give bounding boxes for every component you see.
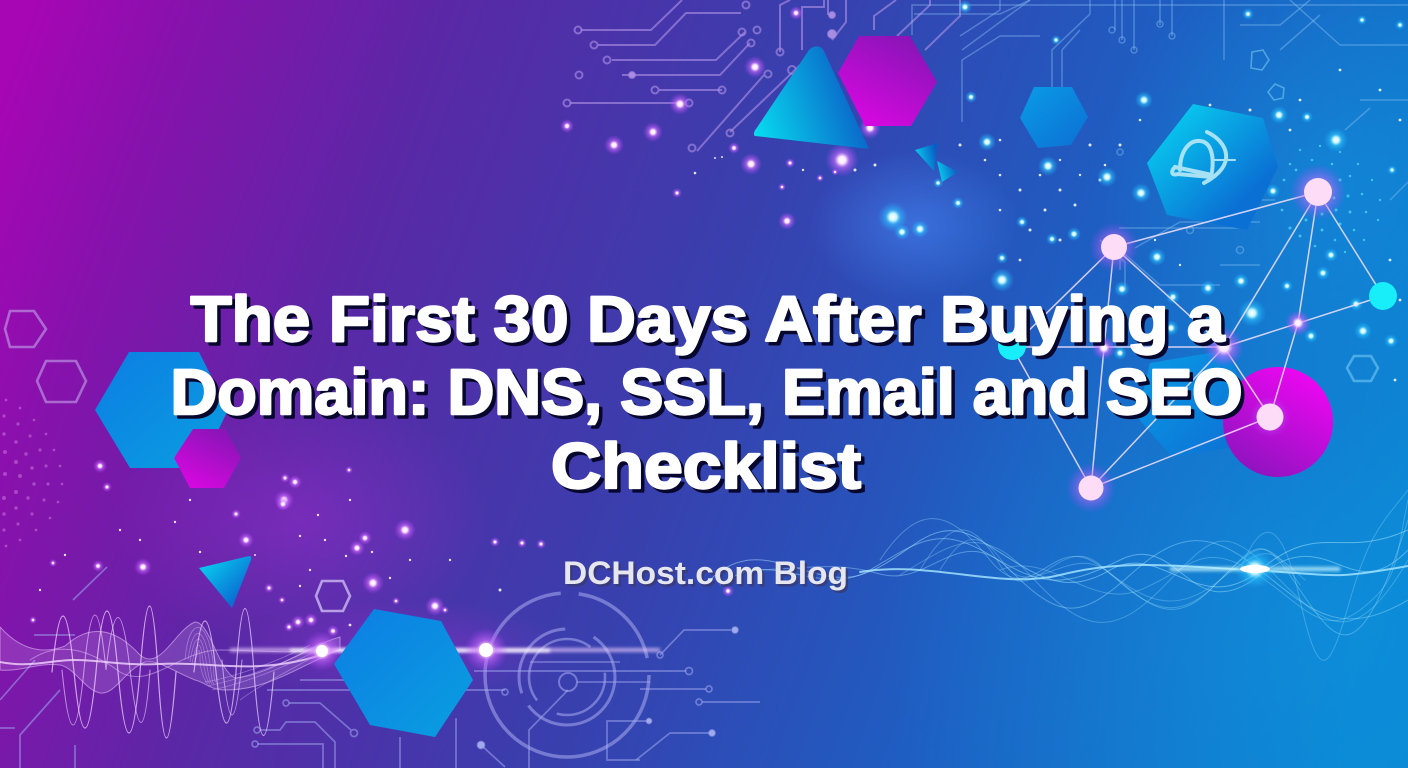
hexagon: magenta left xyxy=(174,429,241,488)
hexagon: blue top xyxy=(1020,87,1088,148)
circuit lines: top right xyxy=(912,0,1408,290)
network nodes: cyan xyxy=(998,282,1397,360)
sparkle particles: cyan xyxy=(878,0,1405,360)
dotted halftone around top right node xyxy=(1281,145,1381,253)
target dial xyxy=(485,593,650,757)
subtitle: DCHost.com Blog: DCHost.com Blog xyxy=(563,555,848,591)
network graph xyxy=(998,164,1397,513)
waveform ribbon xyxy=(0,622,340,693)
hexagon: blue bottom xyxy=(334,609,473,737)
title shadow: Domain: DNS, SSL, Email and SEO xyxy=(174,360,1246,432)
sparkle particles: fine white xyxy=(39,69,1401,637)
title text: Domain: DNS, SSL, Email and SEO xyxy=(170,356,1242,428)
waveform: right xyxy=(710,490,1408,660)
dotted halftone left xyxy=(2,399,63,547)
title text: The First 30 Days After Buying a xyxy=(190,283,1225,355)
magenta circle xyxy=(1223,367,1333,477)
hexagon: blue left xyxy=(95,352,228,468)
triangle: cyan bottom left xyxy=(199,556,251,608)
subtitle: DCHost.com Blog: DCHost.com Blog xyxy=(566,558,850,594)
circuit lines: bottom xyxy=(0,567,760,768)
sparkle particles: purple xyxy=(29,6,881,637)
title xyxy=(170,283,1246,506)
hexagon: blue right xyxy=(1137,350,1248,457)
small cyan triangles xyxy=(915,143,958,182)
network nodes: pink xyxy=(1066,164,1346,513)
triangle: cyan top xyxy=(754,46,869,149)
circuit lines: top centre xyxy=(564,0,960,152)
bright streak left xyxy=(230,628,660,672)
title shadow xyxy=(174,286,1246,506)
hexagon with bell icon xyxy=(1147,104,1278,230)
title shadow: Checklist xyxy=(554,434,864,506)
title shadow: The First 30 Days After Buying a xyxy=(194,286,1228,358)
hexagon outline icons xyxy=(5,50,1378,611)
icon: bell xyxy=(1172,132,1235,183)
title text xyxy=(170,283,1242,502)
network lines xyxy=(1012,192,1383,488)
waveform fine mesh xyxy=(185,627,326,700)
bright streak right xyxy=(1170,549,1340,589)
title text: Checklist xyxy=(551,430,861,502)
waveform: left xyxy=(0,606,340,738)
hexagon: magenta top xyxy=(838,36,937,126)
